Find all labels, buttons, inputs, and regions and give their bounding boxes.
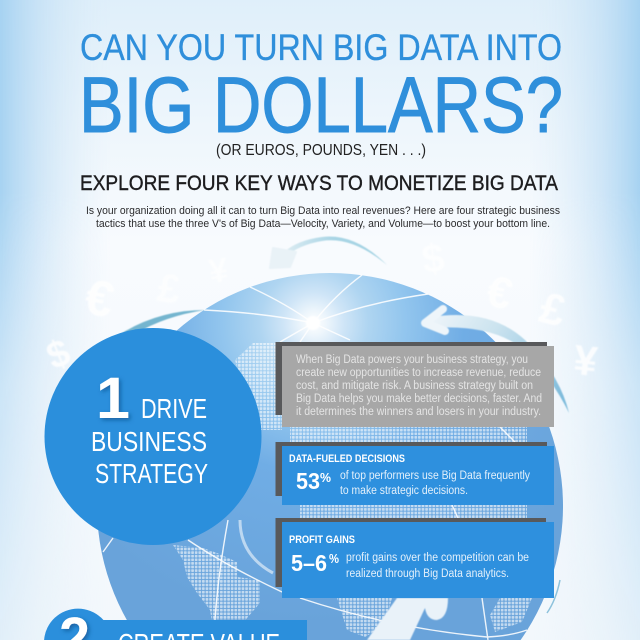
panel: step 1 circle: STRATEGY [95,458,208,489]
panel: step 1 circle: BUSINESS [91,426,207,457]
arrow: top pale curved arrow [270,237,387,268]
illustration: globe [97,273,563,640]
panel: data-fueled decisions: % [320,470,331,485]
icon: faint currency symbols: € [80,268,119,329]
icon: faint currency symbols [41,236,600,385]
intro text [86,205,560,230]
icon: faint currency symbols: $ [41,331,76,378]
icon: faint currency symbols: $ [419,236,447,282]
panel: profit gains: % [329,551,339,566]
panel: data-fueled decisions: DATA-FUELED DECISIONS [289,453,405,465]
panel: data-fueled decisions: of top performers use Big Data frequently [340,470,530,482]
panel: step 1 circle [44,328,262,545]
title: CAN YOU TURN BIG DATA INTO [80,27,562,68]
panel: data-fueled decisions: to make strategic decisions. [340,485,468,497]
globe: network lines [103,275,554,640]
panel: step 1 circle: DRIVE [141,393,207,424]
panel: overview text box: Big Data helps you make better decisions, faster. And [296,393,542,405]
map: dotted continents [173,343,532,640]
title: BIG DOLLARS? [79,60,563,149]
panel: data-fueled decisions [276,442,554,505]
arrow: right curved arrow [425,309,569,413]
arrow: thin arc at right of globe [547,580,560,613]
icon: faint currency symbols: € [482,266,517,320]
panel: profit gains: 5–6 [291,550,327,576]
panel: overview text box: cost, and mitigate risk. A business strategy built on [296,380,533,392]
icon: faint currency symbols: ¥ [206,251,231,291]
hub glow [306,316,320,330]
heading: explore: EXPLORE FOUR KEY WAYS TO MONETIZE BIG DATA [80,172,558,195]
icon: faint currency symbols: £ [155,266,183,312]
panel: overview text box: create new opportunities to increase revenue, reduce [296,367,541,379]
panel: data-fueled decisions: 53 [296,468,320,494]
title [79,27,563,149]
intro text: tactics that use the three V's of Big Data—Velocity, Variety, and Volume—to boost your bottom line. [96,218,550,230]
icon: faint currency symbols: £ [535,283,571,337]
panel: step 1 circle: 1 [96,366,130,431]
panel: profit gains: profit gains over the competition can be [346,552,529,564]
subtitle: currencies: (OR EUROS, POUNDS, YEN . . .) [216,142,426,159]
panel: overview text box: When Big Data powers your business strategy, you [296,354,528,366]
panel: step 2 banner [44,606,307,640]
intro text: Is your organization doing all it can to turn Big Data into real revenues? Here are four strategic business [86,205,560,217]
panel: profit gains: realized through Big Data analytics. [346,568,509,580]
arrow: left teal swoosh [122,310,205,334]
panel: overview text box: it determines the winners and losers in your industry. [296,406,541,418]
arrow: large white bottom arrow [367,598,448,640]
panel: overview text box [276,342,554,427]
panel: profit gains [276,518,554,598]
icon: faint currency symbols: ¥ [571,336,600,385]
panel: profit gains: PROFIT GAINS [289,534,355,546]
